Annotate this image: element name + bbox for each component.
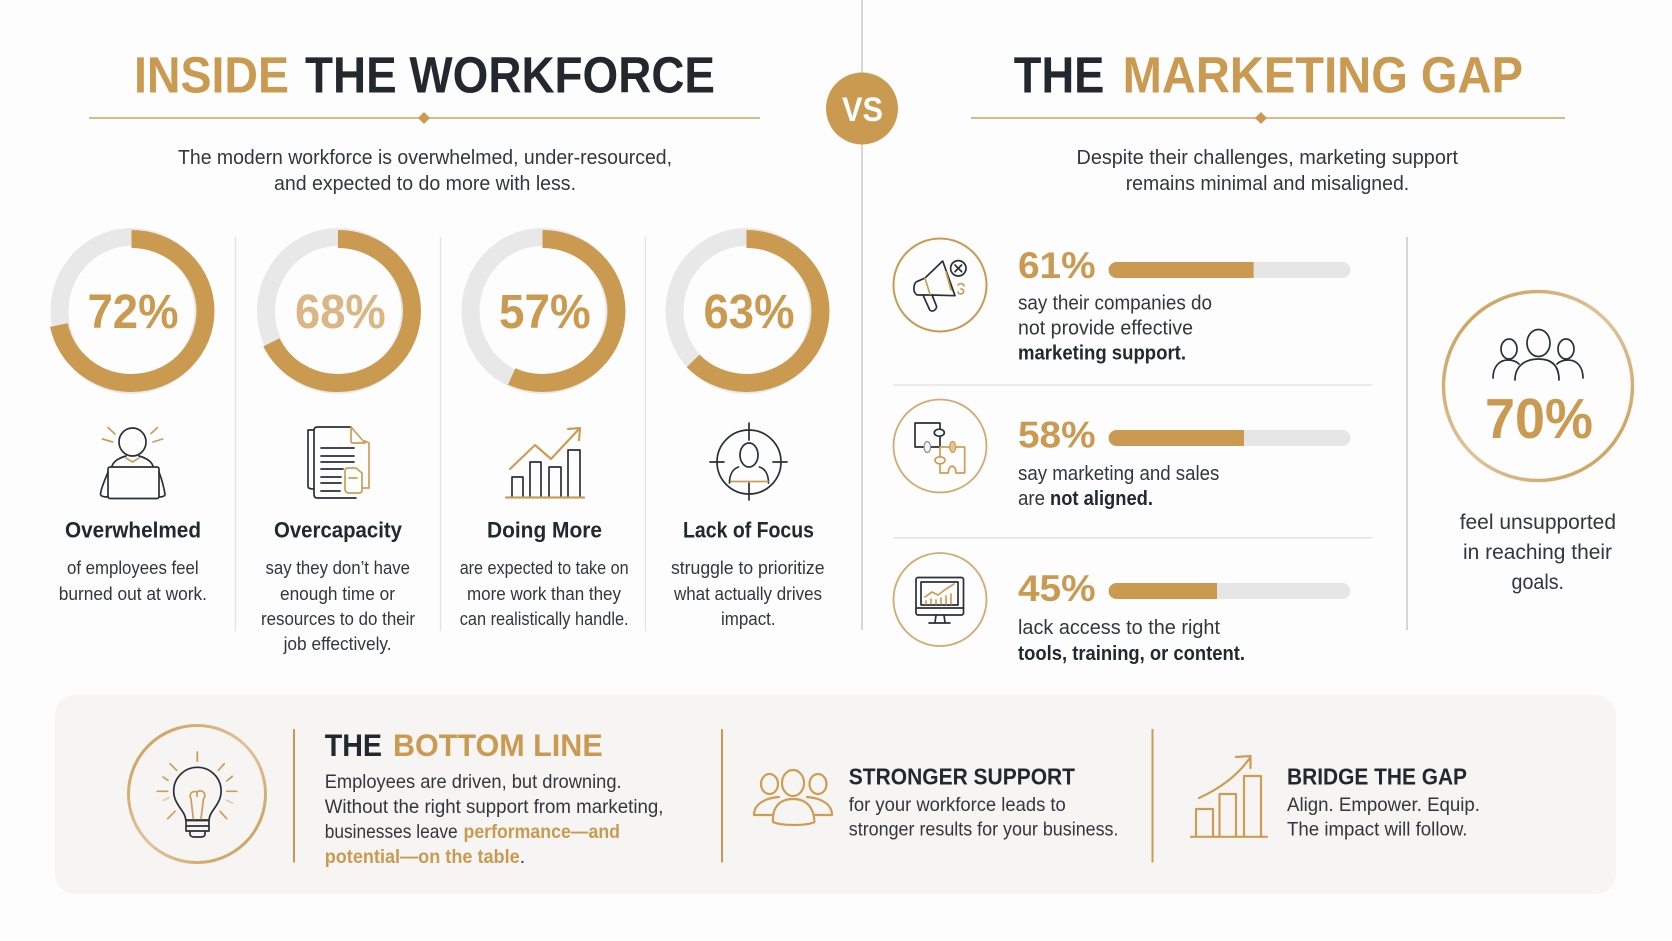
text: bottom line paragraph: . [520, 846, 525, 868]
text: 58% description [1018, 463, 1219, 510]
text: stronger support description [849, 794, 1118, 840]
text: 58% description: are [1018, 488, 1045, 510]
stat: 58%: 58% [1018, 414, 1096, 456]
donut chart: 68%: 68% [295, 286, 386, 339]
stat: 45%: 45% [1018, 568, 1096, 609]
text: overcapacity description: say they don’t have [266, 557, 410, 578]
text: overcapacity description: job effectively. [283, 633, 392, 654]
text: bottom line paragraph: performance—and [464, 821, 620, 843]
text: bottom line paragraph [325, 771, 664, 868]
callout: 70% unsupported [1444, 292, 1632, 594]
donut chart: 63%: 63% [704, 286, 794, 339]
icon: gold team [754, 770, 832, 825]
text: bridge the gap description: The impact will follow. [1287, 818, 1468, 840]
icon: monitor with chart in circle [894, 553, 986, 646]
text: stronger support description: for your workforce leads to [849, 794, 1066, 816]
panel: bottom line [55, 695, 1616, 894]
icon: megaphone in circle [894, 238, 986, 332]
bar chart: 45% [1109, 583, 1350, 599]
subtitle: left [178, 147, 672, 195]
description: feel unsupported [1460, 510, 1616, 534]
text: overwhelmed description [59, 557, 207, 604]
stat: 70% [1485, 387, 1593, 451]
text: 61% description [1018, 292, 1212, 364]
text: 61% description: marketing support. [1018, 342, 1186, 364]
text: lack of focus description: impact. [721, 608, 776, 629]
description: goals. [1512, 570, 1564, 594]
icon: rising bar chart [506, 428, 584, 498]
description: in reaching their [1463, 540, 1612, 564]
heading: doing more: Doing More [487, 518, 602, 542]
donut chart: 68% [264, 237, 412, 385]
text: lack of focus description: what actually drives [673, 583, 822, 604]
icon: team [1493, 330, 1583, 380]
subtitle: right [1076, 147, 1458, 195]
icon: puzzle pieces in circle [894, 400, 986, 492]
donut chart: 57%: 57% [499, 286, 591, 339]
vs badge [826, 72, 898, 144]
text: bottom line paragraph: potential—on the table [325, 846, 520, 868]
text: lack of focus description: struggle to prioritize [671, 557, 824, 578]
ring [1444, 292, 1632, 480]
heading: overwhelmed: Overwhelmed [65, 518, 201, 542]
heading: the bottom line: THE [325, 727, 382, 763]
text: stronger support description: stronger results for your business. [849, 818, 1118, 840]
bar chart: 58% [1109, 430, 1350, 446]
heading: stronger support: STRONGER SUPPORT [849, 764, 1075, 790]
text: 58% description: say marketing and sales [1018, 463, 1219, 485]
text: bottom line paragraph: Employees are driven, but drowning. [325, 771, 622, 793]
donut chart: 72% [58, 237, 206, 385]
text: doing more description [460, 557, 629, 629]
donut chart: 63% [672, 237, 820, 385]
subtitle: right: remains minimal and misaligned. [1126, 173, 1409, 195]
subtitle: right: Despite their challenges, marketing support [1076, 147, 1458, 169]
text: overwhelmed description: burned out at work. [59, 583, 207, 604]
text: 61% description: not provide effective [1018, 318, 1193, 340]
text: bottom line paragraph: Without the right support from marketing, [325, 796, 664, 818]
bar chart: 61% [1109, 262, 1350, 278]
text: overcapacity description: enough time or [280, 583, 395, 604]
vs badge: VS [842, 91, 883, 129]
heading rule: left [89, 112, 760, 124]
text: overcapacity description: resources to do their [261, 608, 415, 629]
text: overcapacity description [261, 557, 415, 654]
text: 45% description [1018, 617, 1245, 665]
stat: 61%: 61% [1018, 245, 1096, 286]
title: inside the workforce [134, 46, 715, 104]
text: 58% description: not aligned. [1050, 488, 1153, 510]
text: bottom line paragraph: businesses leave [325, 821, 458, 843]
text: 61% description: say their companies do [1018, 292, 1212, 314]
text: 45% description: lack access to the right [1018, 617, 1220, 639]
icon: person in target [710, 423, 787, 500]
heading: the bottom line: BOTTOM LINE [393, 727, 603, 763]
heading: lack of focus: Lack of Focus [683, 518, 814, 542]
icon: documents [308, 427, 369, 498]
title: inside the workforce: THE WORKFORCE [305, 46, 715, 104]
text: lack of focus description [671, 557, 824, 629]
title: the marketing gap: MARKETING GAP [1123, 46, 1523, 104]
donut chart: 72%: 72% [88, 286, 178, 339]
title: the marketing gap: THE [1014, 46, 1104, 104]
icon: overwhelmed person at laptop [100, 428, 165, 498]
heading: bridge the gap: BRIDGE THE GAP [1287, 764, 1467, 790]
description [1460, 510, 1616, 594]
title: inside the workforce: INSIDE [134, 46, 289, 104]
text: bridge the gap description: Align. Empower. Equip. [1287, 794, 1480, 816]
text: doing more description: are expected to take on [460, 557, 629, 578]
subtitle: left: and expected to do more with less. [274, 173, 576, 195]
text: overwhelmed description: of employees feel [67, 557, 199, 578]
text: bridge the gap description [1287, 794, 1480, 840]
heading rule: right [971, 112, 1565, 124]
text: doing more description: more work than they [467, 583, 622, 604]
donut chart: 57% [468, 237, 616, 385]
text: 45% description: tools, training, or content. [1018, 643, 1245, 665]
icon: light bulb in circle [128, 726, 266, 862]
subtitle: left: The modern workforce is overwhelmed, under-resourced, [178, 147, 672, 169]
heading: overcapacity: Overcapacity [274, 518, 403, 542]
icon: gold growth bars [1191, 756, 1267, 837]
text: doing more description: can realistically handle. [460, 608, 629, 629]
